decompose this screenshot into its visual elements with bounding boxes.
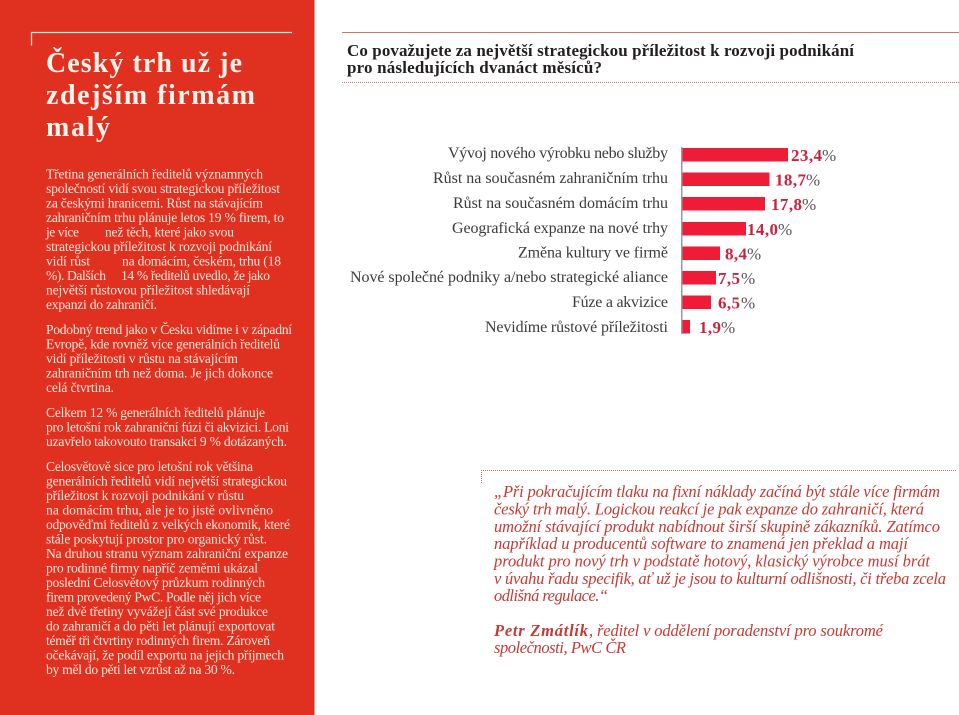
text block: paragraph 1: vidí růst <box>46 254 90 268</box>
row: Nové společné podniky a/nebo strategické aliance: Nové společné podniky a/nebo strategické aliance <box>350 269 668 286</box>
text block: paragraph 3: Celkem 12 % generálních ředitelů plánuje <box>46 405 265 420</box>
quote text: český trh malý. Logickou reakcí je pak expanze do zahraničí, která <box>494 500 924 518</box>
text block: paragraph 4: příležitost k rozvoji podnikání v růstu <box>46 488 244 503</box>
text block: paragraph 3: pro letošní rok zahraniční fúzi či akvizici. Loni <box>46 420 289 434</box>
text block: paragraph 2: zahraničním trh než doma. Je jich dokonce <box>46 366 273 380</box>
text block: paragraph 4: generálních ředitelů vidí největší strategickou <box>46 474 287 488</box>
text block: paragraph 4: by měl do pěti let vzrůst až na 30 %. <box>46 662 235 677</box>
title: Český trh už je <box>46 48 242 79</box>
row: Vývoj nového výrobku nebo služby: Vývoj nového výrobku nebo služby <box>448 145 668 162</box>
text block: paragraph 4: stále poskytují prostor pro organický růst. <box>46 532 267 546</box>
quote text <box>493 482 946 605</box>
text block: paragraph 4: očekávají, že podíl exportu na jejich příjmech <box>46 648 284 662</box>
text block: paragraph 1: na domácím, českém, trhu (18 <box>122 254 281 270</box>
row: Změna kultury ve firmě: % <box>747 244 761 264</box>
text block: paragraph 4: Na druhou stranu význam zahraniční expanze <box>46 546 288 561</box>
text block: paragraph 2 <box>46 321 292 395</box>
quote text: „Při pokračujícím tlaku na fixní náklady začíná být stále více firmám <box>494 482 940 501</box>
text block: paragraph 4: než dvě třetiny vyvážejí část své produkce <box>46 604 268 619</box>
title: malý <box>46 112 110 143</box>
row: Růst na současném domácím trhu: Růst na současném domácím trhu <box>453 195 668 212</box>
row: Geografická expanze na nové trhy <box>452 220 792 239</box>
quote author: společnosti, PwC ČR <box>494 638 626 657</box>
text block: paragraph 1: než těch, které jako svou <box>105 224 234 240</box>
text block: paragraph 4: odpověďmi ředitelů z velkých ekonomik, které <box>46 517 290 532</box>
text block: paragraph 2: Evropě, kde rovněž více generálních ředitelů <box>46 336 280 352</box>
quote text: odlišná regulace.“ <box>494 586 608 605</box>
text block: paragraph 1: zahraničním trhu plánuje letos 19 % firem, to <box>46 210 284 225</box>
row: Fúze a akvizice <box>572 294 755 312</box>
row: Nové společné podniky a/nebo strategické aliance: 7,5 <box>718 269 740 288</box>
bar chart: strategic opportunities <box>350 145 836 337</box>
text block: paragraph 1: za českými hranicemi. Růst na stávajícím <box>46 196 263 210</box>
heading: survey question <box>342 32 959 82</box>
row: Fúze a akvizice: 6,5 <box>718 294 740 312</box>
title <box>46 48 255 143</box>
text block: paragraph 2: Podobný trend jako v Česku vidíme i v západní <box>46 321 292 337</box>
quote text: produkt pro nový trh v podstatě hotový, klasický výrobce musí brát <box>493 552 930 570</box>
row: Růst na současném zahraničním trhu: 18,7 <box>775 170 806 190</box>
row: Růst na současném zahraničním trhu: Růst na současném zahraničním trhu <box>433 170 668 187</box>
text block: paragraph 1: je více <box>45 224 79 240</box>
row: Geografická expanze na nové trhy: % <box>778 220 792 239</box>
heading: survey question: pro následujících dvanáct měsíců? <box>347 58 602 77</box>
row: Geografická expanze na nové trhy: Geografická expanze na nové trhy <box>452 220 668 237</box>
text block: paragraph 1: %). Dalších <box>46 268 106 284</box>
text block: paragraph 1 <box>45 166 284 312</box>
text block: paragraph 4: firem provedený PwC. Podle něj jich více <box>46 590 261 604</box>
text block: paragraph 1: 14 % ředitelů uvedlo, že jako <box>121 268 270 283</box>
text block: paragraph 4: poslední Celosvětový průzkum rodinných <box>46 575 265 590</box>
row: Vývoj nového výrobku nebo služby: 23,4 <box>791 146 822 165</box>
row: Změna kultury ve firmě: Změna kultury ve firmě <box>518 244 668 262</box>
quote author <box>493 621 884 657</box>
title: zdejším firmám <box>46 80 255 111</box>
heading: survey question: Co považujete za největší strategickou příležitost k rozvoji podnikání <box>347 41 854 60</box>
text block: paragraph 1: expanzi do zahraničí. <box>46 297 157 312</box>
text block: paragraph 1: společností vidí svou strategickou příležitost <box>46 181 280 196</box>
text block: paragraph 3: uzavřelo takovouto transakci 9 % dotázaných. <box>46 434 287 449</box>
quote text: umožní stávající produkt nabídnout širší skupině zákazníků. Zatímco <box>494 517 940 536</box>
quote text: například u producentů software to znamená jen překlad a mají <box>494 534 909 553</box>
row: Nevidíme růstové příležitosti <box>485 318 735 337</box>
quote author: Petr Zmátlík <box>493 621 589 640</box>
row: Fúze a akvizice: Fúze a akvizice <box>572 294 668 311</box>
row: Nevidíme růstové příležitosti: Nevidíme růstové příležitosti <box>485 319 669 336</box>
text block: paragraph 1: Třetina generálních ředitelů významných <box>46 166 263 182</box>
text block: paragraph 4 <box>46 459 290 677</box>
text block: paragraph 2: celá čtvrtina. <box>46 380 114 395</box>
row: Růst na současném domácím trhu: 17,8 <box>771 195 802 214</box>
row: Fúze a akvizice: % <box>741 294 755 312</box>
row: Vývoj nového výrobku nebo služby: % <box>822 146 836 165</box>
text block: paragraph 3 <box>46 405 289 449</box>
row: Změna kultury ve firmě: 8,4 <box>725 244 748 264</box>
text block: paragraph 4: pro rodinné firmy napříč zeměmi ukázal <box>46 560 258 576</box>
text block: paragraph 4: téměř tři čtvrtiny rodinných firem. Zároveň <box>46 633 270 648</box>
panel: red sidebar <box>0 0 314 715</box>
text block: paragraph 4: do zahraničí a do pěti let plánují exportovat <box>46 618 275 634</box>
row: Nevidíme růstové příležitosti: 1,9 <box>699 318 721 337</box>
row: Geografická expanze na nové trhy: 14,0 <box>747 220 778 239</box>
row: Změna kultury ve firmě <box>518 244 761 264</box>
text block: paragraph 1: největší růstovou příležitost shledávají <box>46 282 250 298</box>
text block: paragraph 2: vidí příležitosti v růstu na stávajícím <box>46 351 238 366</box>
row: Nové společné podniky a/nebo strategické aliance: % <box>741 269 755 288</box>
row: Vývoj nového výrobku nebo služby <box>448 145 836 165</box>
row: Růst na současném domácím trhu: % <box>802 195 816 214</box>
row: Nevidíme růstové příležitosti: % <box>721 318 735 337</box>
text block: paragraph 1: strategickou příležitost k rozvoji podnikání <box>46 239 272 254</box>
text block: paragraph 4: Celosvětově sice pro letošní rok většina <box>46 459 253 474</box>
row: Růst na současném zahraničním trhu: % <box>806 170 820 190</box>
row: Růst na současném domácím trhu <box>453 195 816 214</box>
quote author: , ředitel v oddělení poradenství pro soukromé <box>589 621 884 640</box>
quote text: v úvahu řadu specifik, ať už je jsou to kulturní odlišnosti, či třeba zcela <box>494 569 946 588</box>
text block: paragraph 4: na domácím trhu, ale je to jistě ovlivněno <box>46 502 273 518</box>
row: Růst na současném zahraničním trhu <box>433 170 820 190</box>
callout: quote <box>482 470 957 657</box>
